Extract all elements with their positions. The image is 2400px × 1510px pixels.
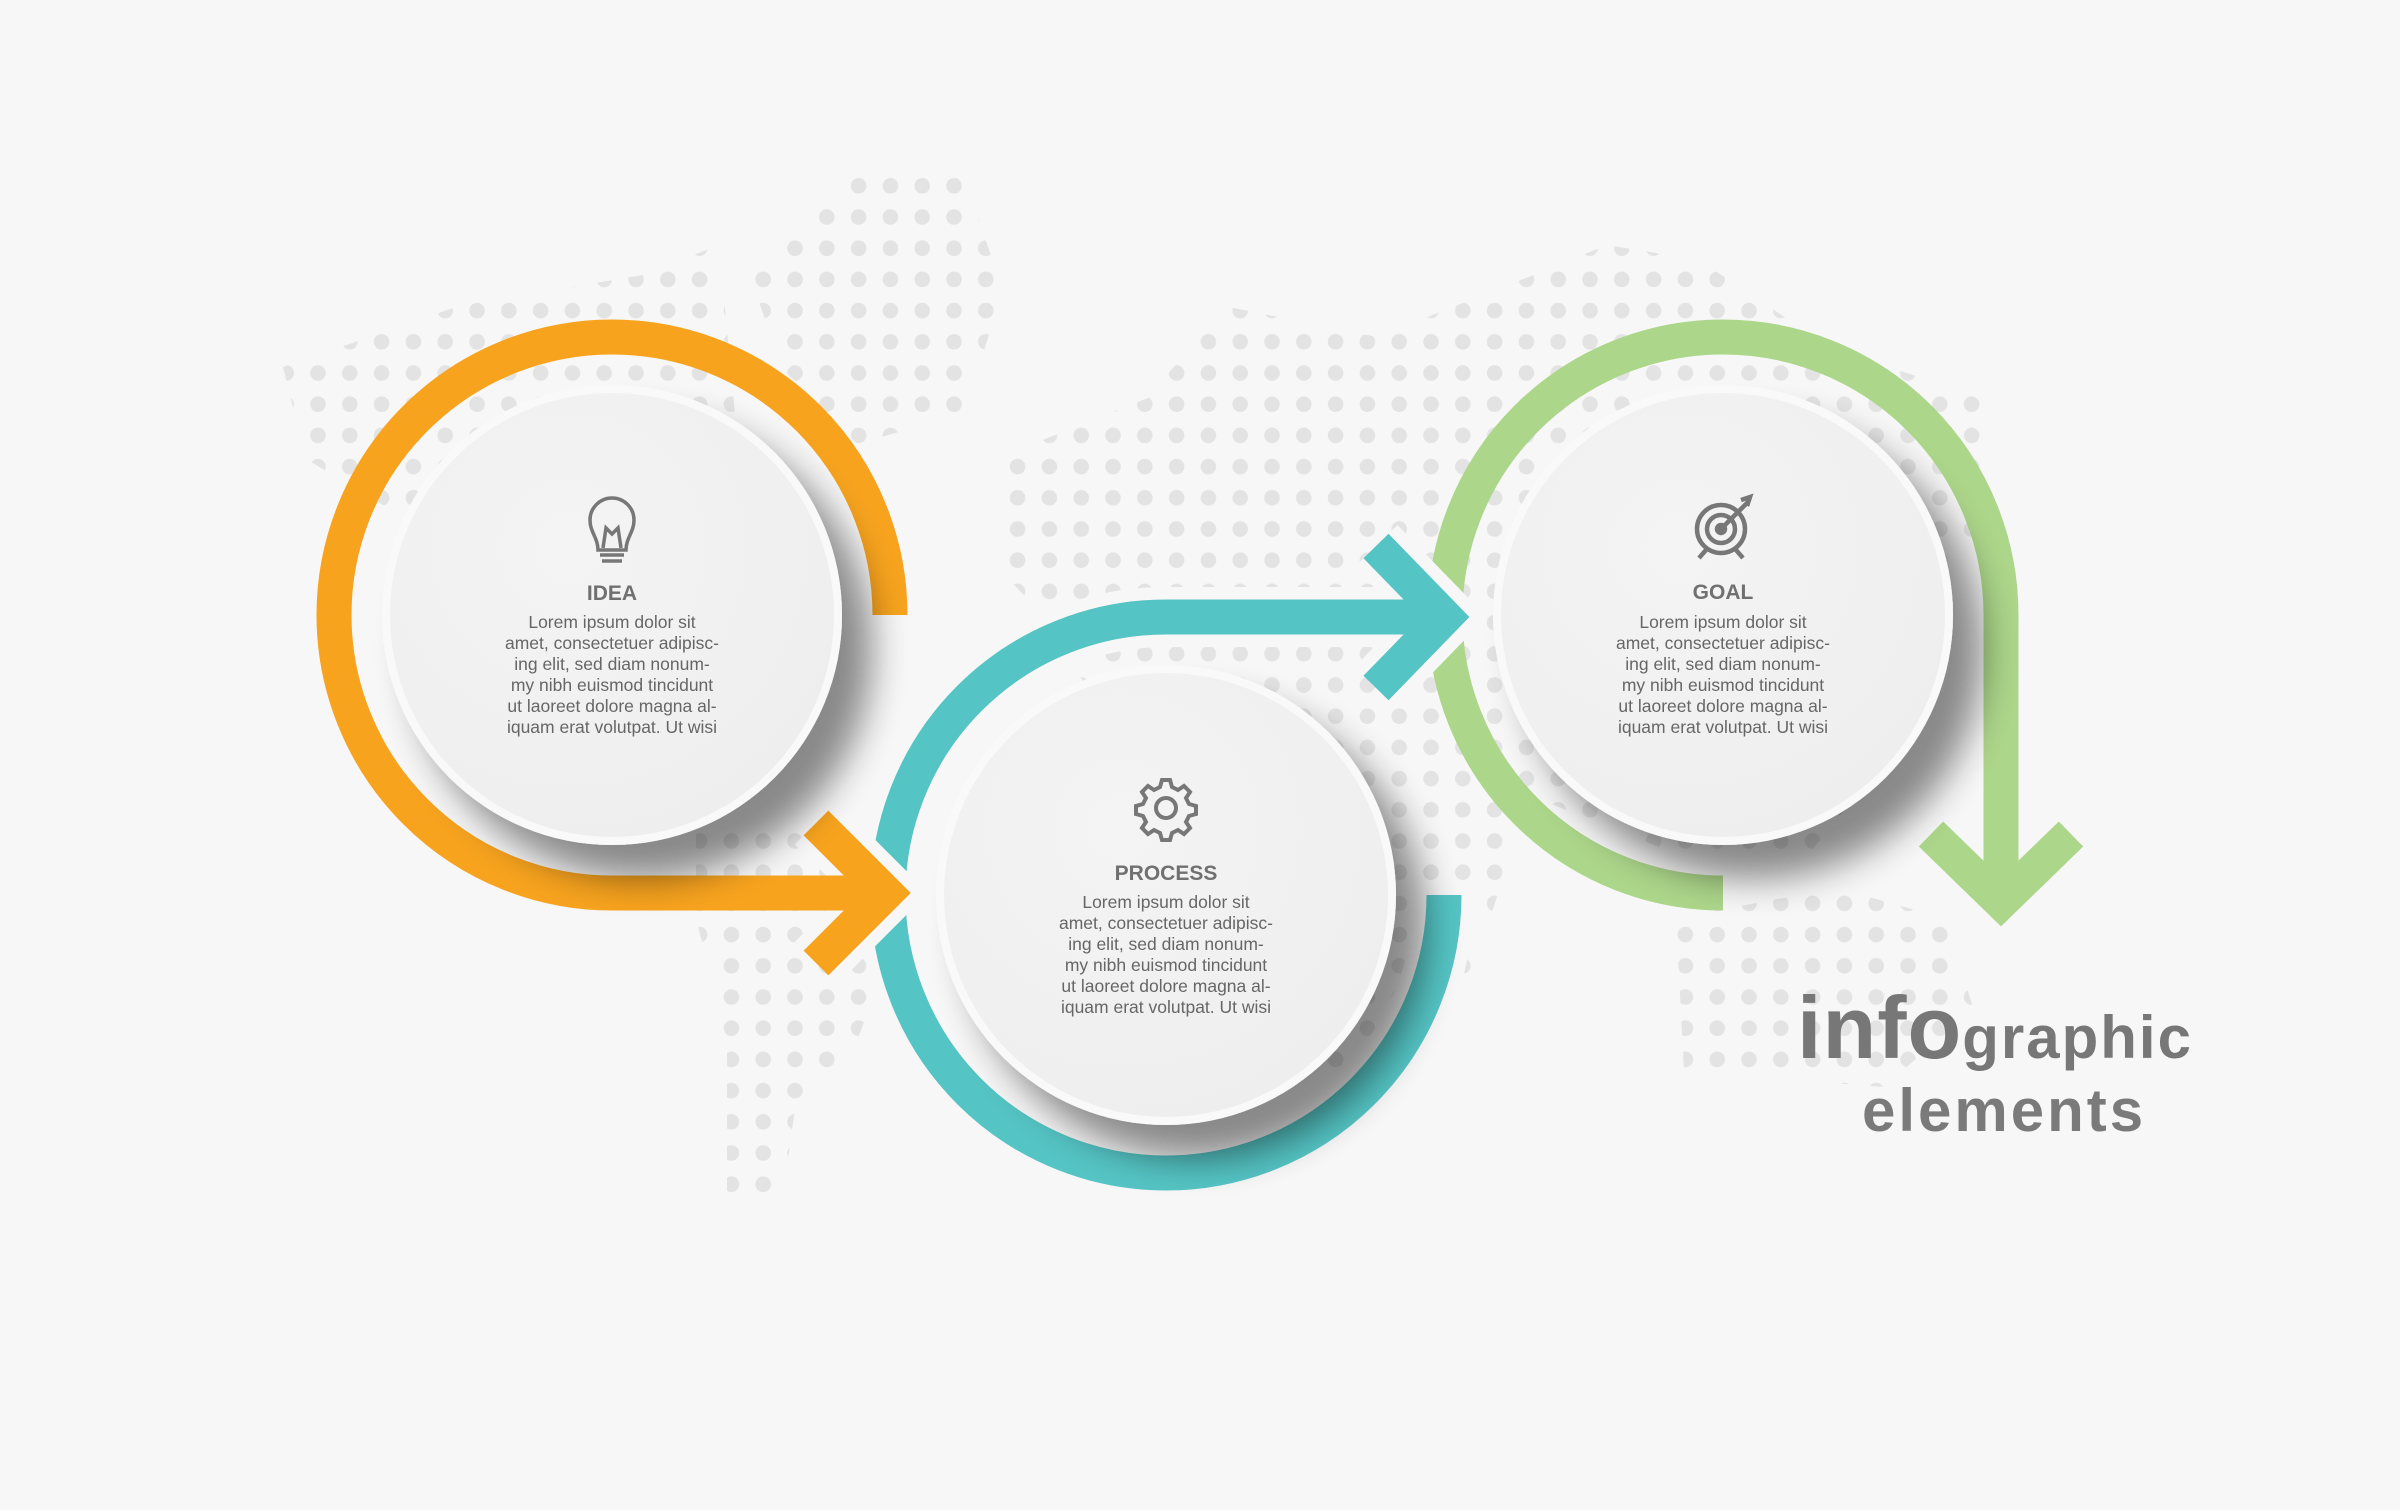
- panel: goal: iquam erat volutpat. Ut wisi: [1618, 717, 1828, 737]
- icon: target: [1697, 497, 1750, 558]
- panel: idea: [382, 385, 842, 845]
- icon: light bulb: [590, 498, 634, 561]
- background: dotted world map: [283, 176, 1990, 1209]
- panel: process: PROCESS: [1115, 862, 1217, 885]
- panel: idea: my nibh euismod tincidunt: [511, 675, 713, 695]
- panel: idea: iquam erat volutpat. Ut wisi: [507, 717, 717, 737]
- panel: process: iquam erat volutpat. Ut wisi: [1061, 997, 1271, 1017]
- panel: goal: ut laoreet dolore magna al-: [1618, 696, 1828, 716]
- panel: goal: amet, consectetuer adipisc-: [1616, 633, 1830, 653]
- panel: idea: ut laoreet dolore magna al-: [507, 696, 717, 716]
- title: infographic elements: infographic: [1797, 978, 2193, 1077]
- panel: process: Lorem ipsum dolor sit: [1082, 892, 1250, 912]
- panel: goal: GOAL: [1693, 581, 1753, 604]
- panel: process: [936, 665, 1396, 1125]
- arrow: green ring to down arrow: [1445, 337, 2071, 902]
- panel: goal: ing elit, sed diam nonum-: [1625, 654, 1821, 674]
- panel: goal: [1493, 385, 1953, 845]
- arrow: teal ring to right arrow: [888, 546, 1445, 1173]
- panel: idea: IDEA: [587, 582, 637, 605]
- icon: gear: [1136, 780, 1196, 840]
- panel: idea: ing elit, sed diam nonum-: [514, 654, 710, 674]
- panel: goal: Lorem ipsum dolor sit: [1639, 612, 1807, 632]
- title: infographic elements: elements: [1862, 1077, 2146, 1144]
- panel: idea: amet, consectetuer adipisc-: [505, 633, 719, 653]
- panel: goal: my nibh euismod tincidunt: [1622, 675, 1824, 695]
- panel: process: amet, consectetuer adipisc-: [1059, 913, 1273, 933]
- title: infographic elements: [1797, 978, 2193, 1144]
- panel: process: ut laoreet dolore magna al-: [1061, 976, 1271, 996]
- panel: idea: Lorem ipsum dolor sit: [528, 612, 696, 632]
- panel: process: my nibh euismod tincidunt: [1065, 955, 1267, 975]
- arrow: orange ring to right arrow: [334, 337, 890, 963]
- panel: process: ing elit, sed diam nonum-: [1068, 934, 1264, 954]
